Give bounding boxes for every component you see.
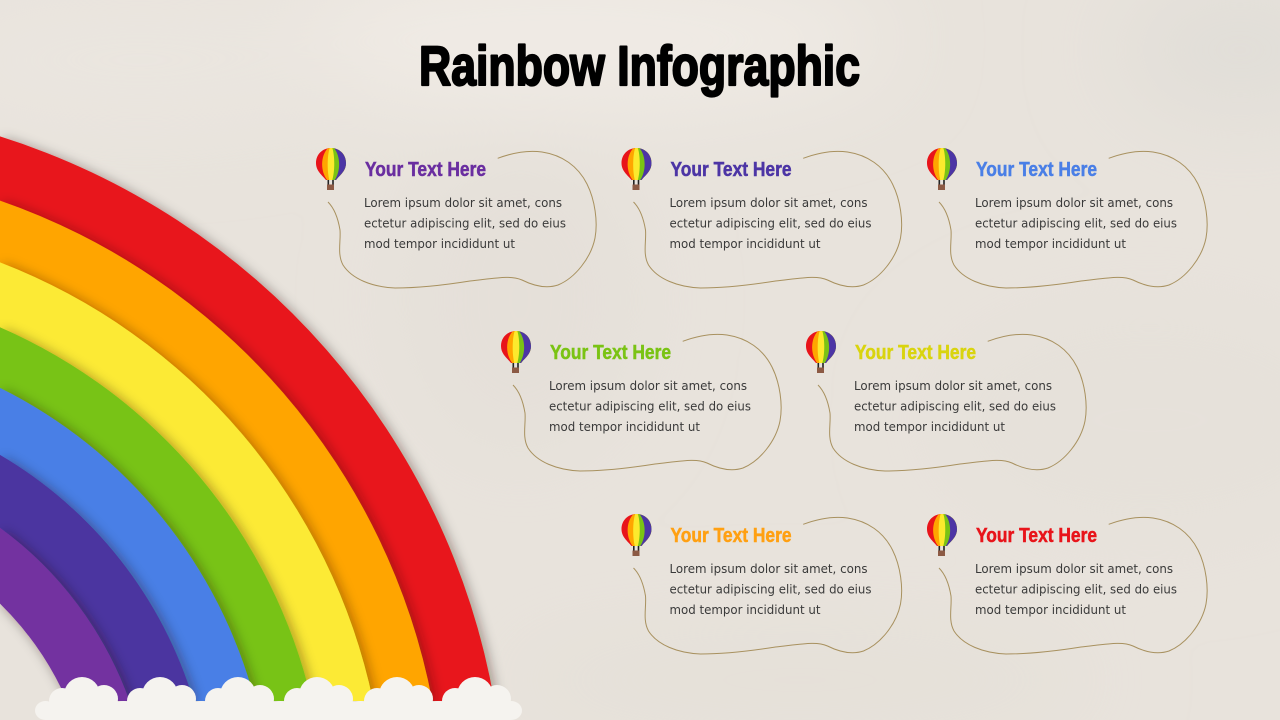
band: indigo xyxy=(0,455,194,701)
icon: balloon xyxy=(622,147,652,190)
band: yellow xyxy=(0,262,373,701)
body text: Lorem ipsum dolor sit amet, cons xyxy=(854,379,1052,393)
icon: balloon xyxy=(927,513,957,556)
body text xyxy=(670,562,872,617)
body text xyxy=(975,562,1177,617)
card: green xyxy=(501,330,781,471)
heading: Your Text Here xyxy=(670,159,792,181)
body text xyxy=(549,379,751,434)
body text: mod tempor incididunt ut xyxy=(670,603,821,617)
body text xyxy=(670,196,872,251)
heading: Your Text Here xyxy=(550,342,671,364)
outline xyxy=(634,517,902,654)
body text: ectetur adipiscing elit, sed do eius xyxy=(549,400,751,414)
icon: balloon xyxy=(316,147,346,190)
body text: ectetur adipiscing elit, sed do eius xyxy=(670,582,872,596)
card: yellow xyxy=(806,330,1086,471)
body text: mod tempor incididunt ut xyxy=(975,237,1126,251)
band: blue xyxy=(0,388,255,701)
icon: balloon xyxy=(806,330,836,373)
body text: mod tempor incididunt ut xyxy=(854,420,1005,434)
card: red xyxy=(927,513,1207,654)
body text: Lorem ipsum dolor sit amet, cons xyxy=(364,196,562,210)
body text: ectetur adipiscing elit, sed do eius xyxy=(975,216,1177,230)
body text: Lorem ipsum dolor sit amet, cons xyxy=(670,562,868,576)
rainbow arcs xyxy=(0,136,494,701)
heading: Your Text Here xyxy=(855,342,976,364)
icon: balloon xyxy=(927,147,957,190)
heading: Your Text Here xyxy=(976,159,1097,181)
outline xyxy=(818,334,1086,471)
cloud 2 xyxy=(113,677,196,720)
cloud 3 xyxy=(191,677,274,720)
card: blue xyxy=(927,147,1207,288)
cloud 5 xyxy=(350,677,433,720)
band: orange xyxy=(0,201,432,701)
body text: ectetur adipiscing elit, sed do eius xyxy=(854,400,1056,414)
body text: ectetur adipiscing elit, sed do eius xyxy=(975,582,1177,596)
band: green xyxy=(0,327,312,701)
body text: ectetur adipiscing elit, sed do eius xyxy=(670,216,872,230)
heading: Your Text Here xyxy=(670,525,792,547)
body text: mod tempor incididunt ut xyxy=(364,237,515,251)
title: Rainbow Infographic xyxy=(419,34,860,97)
outline xyxy=(939,517,1207,654)
body text: mod tempor incididunt ut xyxy=(670,237,821,251)
body text: mod tempor incididunt ut xyxy=(975,603,1126,617)
clouds xyxy=(35,677,522,720)
cloud 4 xyxy=(270,677,353,720)
body text: ectetur adipiscing elit, sed do eius xyxy=(364,216,566,230)
card: orange xyxy=(622,513,902,654)
heading: Your Text Here xyxy=(365,159,486,181)
outline xyxy=(939,151,1207,288)
body text: mod tempor incididunt ut xyxy=(549,420,700,434)
card: indigo xyxy=(622,147,902,288)
body text: Lorem ipsum dolor sit amet, cons xyxy=(975,196,1173,210)
outline xyxy=(634,151,902,288)
body text: Lorem ipsum dolor sit amet, cons xyxy=(549,379,747,393)
body text xyxy=(854,379,1056,434)
outline xyxy=(328,151,596,288)
cloud 1 xyxy=(35,677,118,720)
band: red xyxy=(0,136,494,701)
cloud 6 xyxy=(428,677,522,720)
body text: Lorem ipsum dolor sit amet, cons xyxy=(670,196,868,210)
heading: Your Text Here xyxy=(976,525,1097,547)
icon: balloon xyxy=(622,513,652,556)
body text: Lorem ipsum dolor sit amet, cons xyxy=(975,562,1173,576)
band: purple xyxy=(0,528,130,701)
card: purple xyxy=(316,147,596,288)
outline xyxy=(513,334,781,471)
icon: balloon xyxy=(501,330,531,373)
body text xyxy=(364,196,566,251)
body text xyxy=(975,196,1177,251)
